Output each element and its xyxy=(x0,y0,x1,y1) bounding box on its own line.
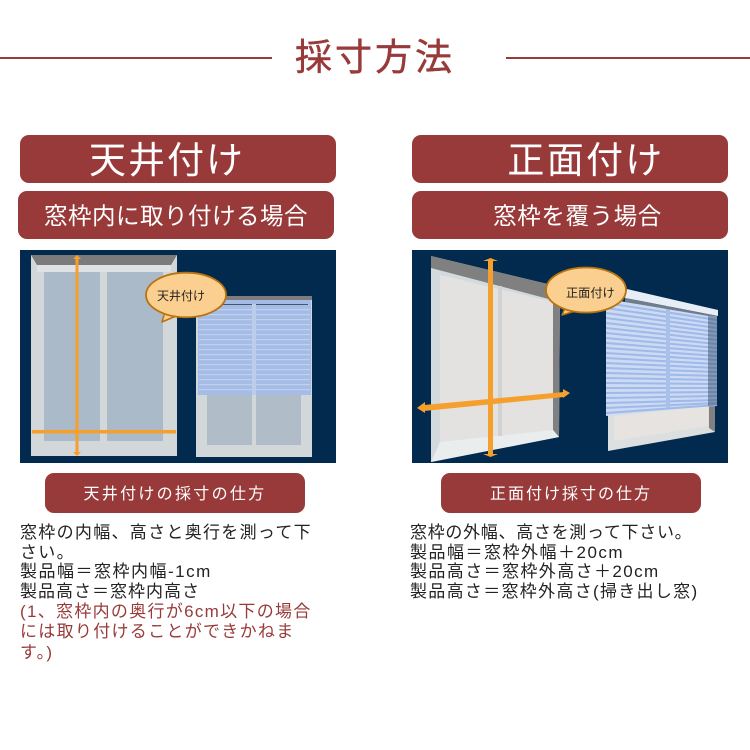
window with measurement arrows xyxy=(417,256,570,462)
subheading: covering window frame: 窓枠を覆う場合 xyxy=(493,203,662,229)
heading: front mount xyxy=(412,135,728,183)
heading: ceiling mount xyxy=(20,135,336,183)
text block: ceiling mount instructions: (1、窓枠内の奥行が6cm以下の場合 xyxy=(20,602,312,621)
window with blind xyxy=(196,296,312,457)
button: front mount measuring xyxy=(441,473,701,513)
subheading: inside window frame xyxy=(18,191,334,239)
button: ceiling mount measuring xyxy=(45,473,305,513)
heading: front mount: 正面付け xyxy=(507,140,665,181)
heading: ceiling mount: 天井付け xyxy=(89,140,245,181)
callout: ceiling mount xyxy=(146,273,226,322)
text block: ceiling mount instructions: 製品高さ＝窓枠内高さ xyxy=(20,582,200,601)
window with blind xyxy=(606,289,718,451)
subheading: inside window frame: 窓枠内に取り付ける場合 xyxy=(44,203,308,229)
text block: front mount instructions xyxy=(410,523,698,601)
callout: front mount xyxy=(546,268,626,315)
text block: front mount instructions: 製品幅＝窓枠外幅＋20cm xyxy=(410,543,624,562)
title: 採寸方法 xyxy=(295,37,455,78)
text block: ceiling mount instructions xyxy=(20,523,312,662)
text block: ceiling mount instructions: には取り付けることができかねま xyxy=(20,622,294,641)
text block: ceiling mount instructions: 製品幅＝窓枠内幅-1cm xyxy=(20,562,212,581)
text block: ceiling mount instructions: す。) xyxy=(20,643,53,662)
callout: ceiling mount: 天井付け xyxy=(157,289,205,303)
text block: front mount instructions: 製品高さ＝窓枠外高さ＋20cm xyxy=(410,562,660,581)
subheading: covering window frame xyxy=(412,191,728,239)
text block: front mount instructions: 製品高さ＝窓枠外高さ(掃き出し窓) xyxy=(410,582,698,601)
callout: front mount: 正面付け xyxy=(566,286,615,300)
illustration: front mount xyxy=(412,250,728,463)
text block: ceiling mount instructions: さい。 xyxy=(20,543,75,562)
button: front mount measuring: 正面付け採寸の仕方 xyxy=(490,486,652,503)
illustration: ceiling mount xyxy=(20,250,336,463)
text block: ceiling mount instructions: 窓枠の内幅、高さと奥行を測って下 xyxy=(20,523,312,542)
button: ceiling mount measuring: 天井付けの採寸の仕方 xyxy=(83,486,266,503)
window with measurement arrows xyxy=(31,255,177,456)
text block: front mount instructions: 窓枠の外幅、高さを測って下さい。 xyxy=(410,523,692,542)
